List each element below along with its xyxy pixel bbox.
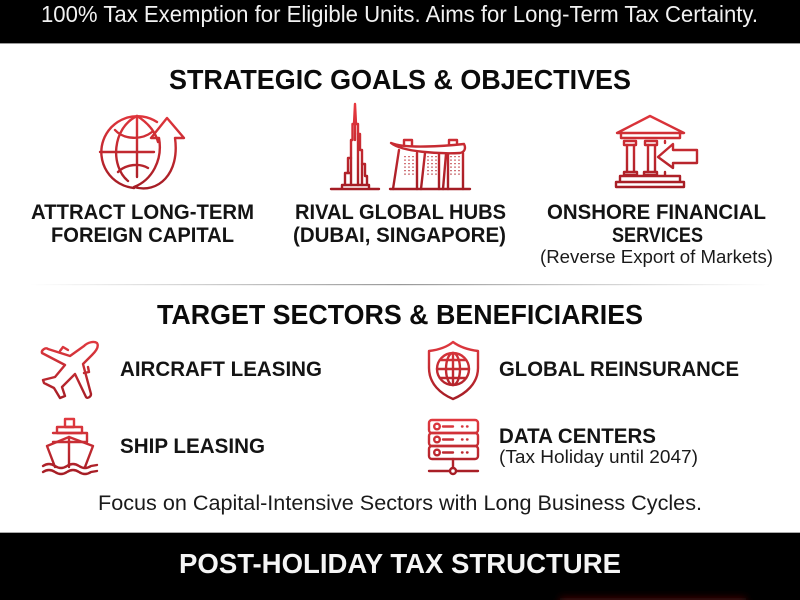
heading: strategic goals: STRATEGIC GOALS & OBJECTIVES <box>169 64 631 95</box>
panel: attract capital <box>31 116 254 247</box>
icon: marina bay towers <box>390 140 470 189</box>
panel: global hubs <box>293 104 506 247</box>
label line 2: (DUBAI, SINGAPORE) <box>293 224 506 247</box>
sector: aircraft leasing <box>42 342 322 398</box>
sector: global reinsurance <box>429 342 739 399</box>
icon: bank with inward arrow <box>616 116 697 187</box>
panel: onshore finance <box>540 116 773 267</box>
top banner: 100% Tax Exemption for Eligible Units. Aims for Long-Term Tax Certainty. <box>41 1 758 27</box>
icon: server rack <box>429 420 478 474</box>
label: AIRCRAFT LEASING <box>120 358 322 381</box>
bottom banner: POST-HOLIDAY TAX STRUCTURE <box>179 548 621 579</box>
label: DATA CENTERS <box>499 425 656 448</box>
bottom banner <box>0 532 800 600</box>
label: RIVAL GLOBAL HUBS <box>295 201 506 224</box>
sector: data centers <box>429 420 698 474</box>
label: SHIP LEASING <box>120 435 265 458</box>
label: GLOBAL REINSURANCE <box>499 358 739 381</box>
sector: ship leasing <box>43 419 265 474</box>
top banner <box>0 0 800 44</box>
caption: Focus on Capital-Intensive Sectors with Long Business Cycles. <box>98 492 702 515</box>
label: ATTRACT LONG-TERM <box>31 201 254 224</box>
heading: target sectors: TARGET SECTORS & BENEFICIARIES <box>157 299 643 330</box>
icon: shield with globe <box>429 342 478 399</box>
sublabel: (Reverse Export of Markets) <box>540 247 773 267</box>
icon: globe with rising arrow <box>100 116 184 188</box>
label line 2: FOREIGN CAPITAL <box>51 224 234 247</box>
sublabel: (Tax Holiday until 2047) <box>499 447 698 467</box>
label: ONSHORE FINANCIAL <box>547 201 766 224</box>
icon: tower skyline <box>331 104 379 189</box>
label line 2: SERVICES <box>612 224 703 247</box>
icon: airplane <box>42 342 98 398</box>
icon: ship <box>43 419 97 474</box>
